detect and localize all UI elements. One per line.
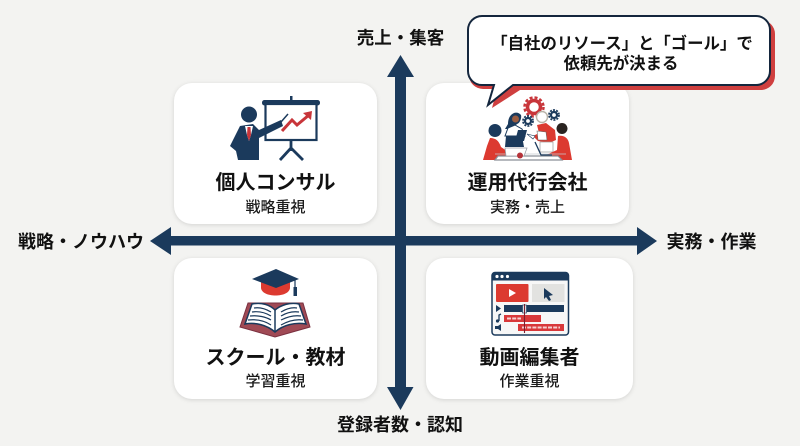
left person — [488, 124, 502, 137]
subheading: 学習重視: 学習重視 — [245, 373, 306, 390]
gears — [528, 100, 540, 114]
horizontal arrow — [150, 227, 657, 255]
axis label: right: 実務・作業 — [666, 232, 756, 252]
subheading: 戦略重視: 戦略重視 — [245, 199, 306, 216]
subheading: 実務・売上: 実務・売上 — [490, 199, 565, 216]
panel: 運用代行会社 — [426, 83, 629, 224]
vertical arrow — [387, 55, 414, 410]
callout: speech bubble — [467, 15, 775, 108]
callout body — [468, 16, 770, 105]
panel: スクール・教材 — [174, 258, 377, 399]
right person — [556, 123, 568, 134]
callout line 1: 「自社のリソース」と「ゴール」で — [491, 35, 753, 53]
axis label: top: 売上・集客 — [357, 28, 444, 48]
callout line 2: 依頼先が決まる — [564, 55, 678, 73]
subheading: 作業重視: 作業重視 — [499, 373, 560, 390]
panel: 動画編集者 — [426, 258, 633, 399]
axis label: left: 戦略・ノウハウ — [18, 232, 144, 252]
heading: 個人コンサル: 個人コンサル — [216, 172, 336, 194]
panel: 個人コンサル — [174, 83, 377, 224]
woman — [505, 113, 521, 129]
callout shadow — [469, 20, 775, 108]
table, laptop and papers — [495, 153, 566, 155]
heading: スクール・教材: スクール・教材 — [206, 347, 346, 369]
heading: 動画編集者: 動画編集者 — [480, 347, 580, 369]
axis label: bottom: 登録者数・認知 — [337, 415, 463, 435]
man with grey hair — [536, 112, 548, 122]
heading: 運用代行会社: 運用代行会社 — [468, 172, 588, 194]
